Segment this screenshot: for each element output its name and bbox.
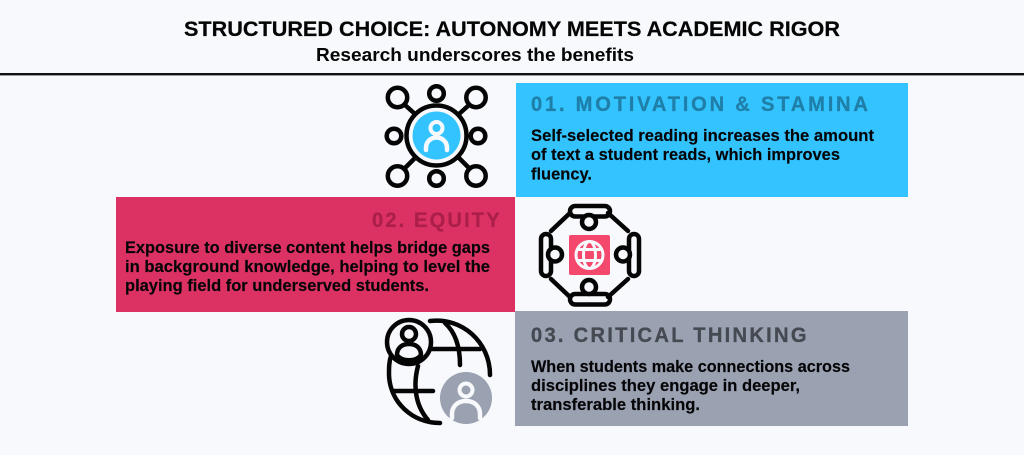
text block: 01: of text a student reads, which improves	[531, 145, 840, 164]
panel: 03 critical thinking	[515, 311, 908, 426]
text block: 01	[531, 126, 874, 184]
text block: 03: When students make connections across	[531, 357, 850, 376]
header	[184, 18, 840, 65]
panel: 01 motivation and stamina	[516, 83, 908, 197]
subtitle: Research underscores the benefits	[316, 45, 634, 65]
icon: globe with people	[387, 320, 492, 424]
icon: globe in connected ring	[541, 206, 639, 304]
heading: 02: 02. EQUITY	[372, 209, 500, 232]
text block: 03: transferable thinking.	[531, 395, 700, 414]
text block: 02: playing field for underserved students.	[125, 276, 429, 295]
heading: 01: 01. MOTIVATION & STAMINA	[531, 93, 868, 116]
text block: 03: disciplines they engage in deeper,	[531, 376, 800, 395]
text block: 02: Exposure to diverse content helps bridge gaps	[125, 238, 490, 257]
text block: 01: Self-selected reading increases the amount	[531, 126, 874, 145]
title: STRUCTURED CHOICE: AUTONOMY MEETS ACADEMIC RIGOR	[184, 18, 840, 41]
text block: 03	[531, 357, 850, 414]
text block: 02: in background knowledge, helping to level the	[125, 257, 490, 276]
text block: 01: fluency.	[531, 164, 592, 184]
panel: 02 equity	[116, 197, 515, 312]
heading: 03: 03. CRITICAL THINKING	[531, 324, 807, 347]
icon: network with person	[387, 86, 486, 186]
text block: 02	[125, 238, 490, 295]
